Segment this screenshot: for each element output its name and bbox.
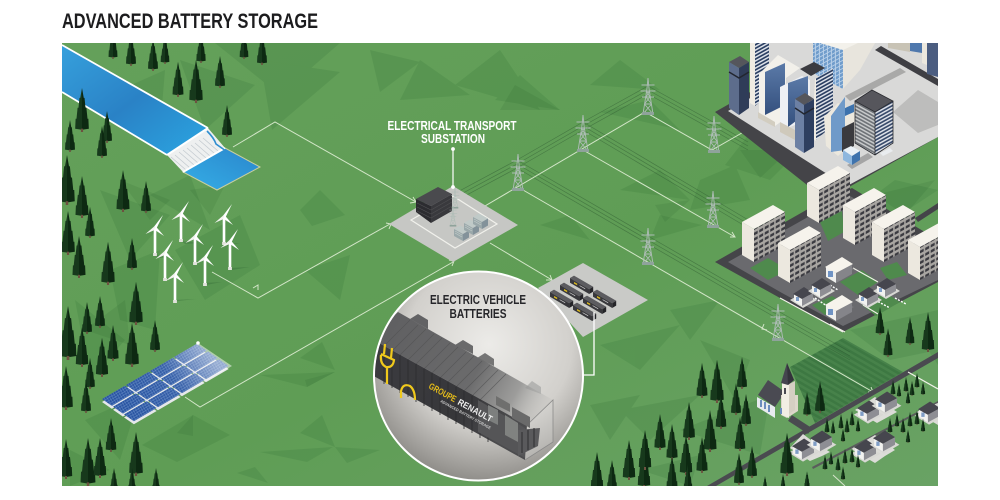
solar panels	[102, 341, 232, 424]
plug icon	[381, 344, 415, 400]
container brand text: ADVANCED BATTERY STORAGE	[440, 398, 492, 430]
container brand text	[429, 384, 494, 430]
apartment blocks	[742, 166, 951, 283]
transparent end with battery racks	[478, 396, 553, 460]
houses	[790, 257, 900, 321]
upper right buildings	[888, 43, 938, 77]
container brand text: GROUPE	[427, 381, 458, 404]
label: electric vehicle batteries	[430, 292, 526, 321]
callout line: batteries	[584, 312, 595, 376]
transformers	[454, 214, 488, 241]
container brand text: RENAULT	[456, 397, 495, 424]
substation building	[416, 187, 452, 223]
striped office	[855, 90, 893, 155]
pylons	[510, 78, 786, 341]
substation	[389, 186, 518, 262]
panel: battery close-up circle	[370, 272, 583, 480]
river and dam	[62, 45, 260, 190]
container illustration	[370, 312, 553, 460]
wind turbines	[146, 201, 250, 303]
label: electric vehicle batteries: BATTERIES	[450, 306, 507, 321]
dark office tower	[729, 56, 749, 115]
battery storage pad	[538, 263, 648, 337]
village roads	[707, 324, 938, 486]
label: electric vehicle batteries: ELECTRIC VEHICLE	[430, 292, 526, 307]
low-rise blocks	[824, 97, 860, 165]
village houses	[789, 392, 944, 463]
power flow lines	[185, 112, 873, 407]
power transmission wires	[450, 86, 850, 360]
skyscrapers	[729, 43, 893, 165]
label: substation second line: SUBSTATION	[421, 131, 485, 146]
callout line: substation	[451, 147, 455, 189]
dark office tower front	[795, 93, 814, 153]
title: ADVANCED BATTERY STORAGE	[62, 10, 318, 33]
district ground and roads	[715, 188, 938, 332]
glass tower top	[813, 43, 875, 89]
city ground and roads	[715, 43, 938, 200]
apartment district	[715, 166, 951, 332]
church	[757, 363, 798, 418]
field	[790, 338, 903, 423]
city district	[715, 43, 938, 200]
label: electrical transport substation: ELECTRICAL TRANSPORT	[388, 118, 517, 133]
